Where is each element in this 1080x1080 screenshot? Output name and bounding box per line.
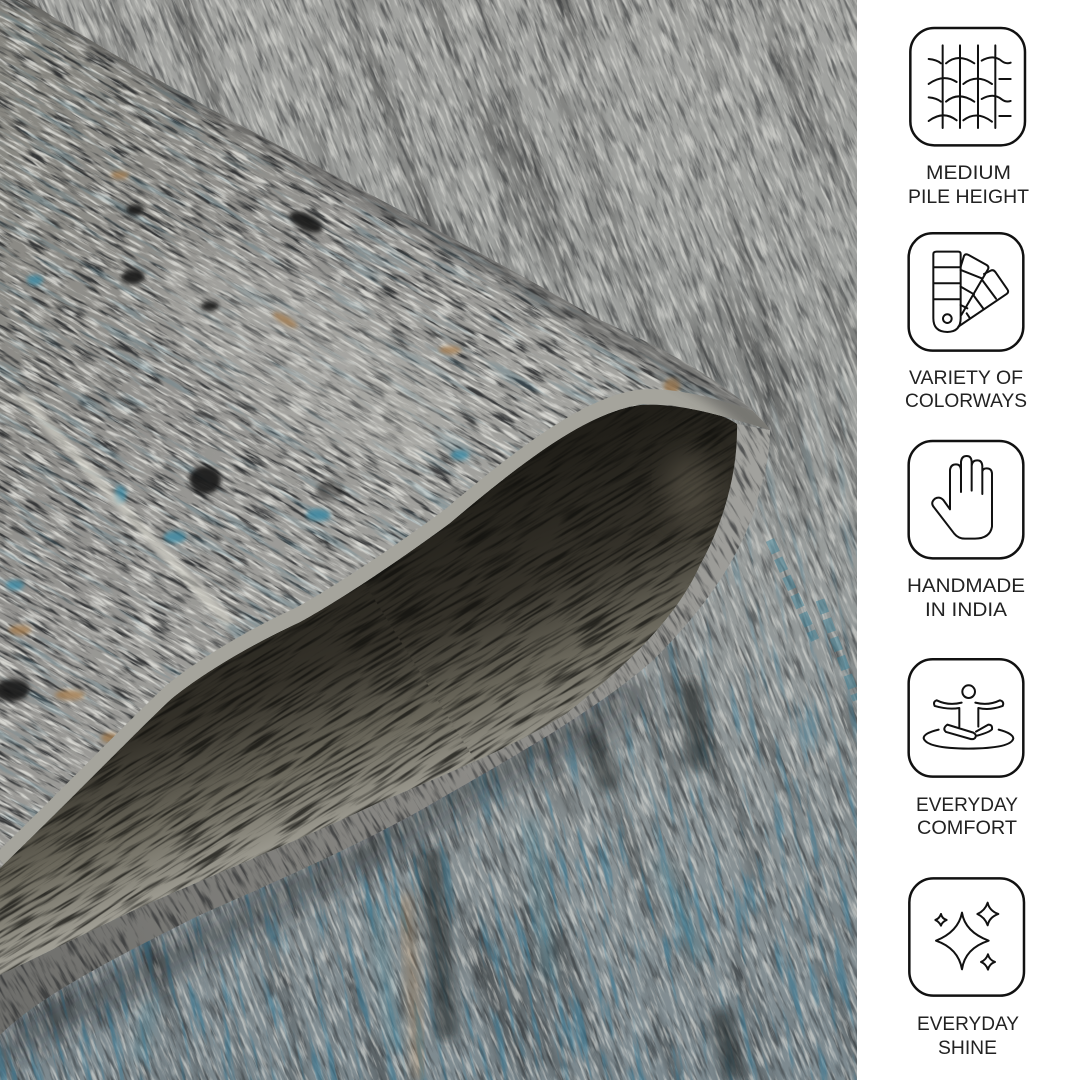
orange flecks (9, 171, 680, 743)
feature: handmade in india (907, 441, 1025, 621)
panel: rug photo (0, 0, 857, 1080)
feature: everyday shine (909, 878, 1024, 1059)
label: variety of colorways: COLORWAYS (905, 391, 1027, 412)
label: variety of colorways (905, 368, 1027, 412)
rug backing underside (0, 400, 760, 1000)
lip of the fold (0, 397, 770, 860)
label: medium pile height (908, 163, 1029, 208)
label: handmade in india (907, 576, 1025, 621)
pale streak (20, 395, 230, 625)
panel: white sidebar (857, 0, 1080, 1080)
label: variety of colorways: VARIETY OF (909, 368, 1023, 389)
label: medium pile height: PILE HEIGHT (908, 187, 1029, 208)
icon: meditating figure (909, 659, 1023, 777)
label: everyday shine (917, 1014, 1019, 1059)
label: everyday comfort: COMFORT (917, 818, 1017, 839)
rolled edge rope (0, 424, 770, 1035)
label: handmade in india: IN INDIA (925, 600, 1007, 621)
label: everyday comfort (916, 795, 1018, 839)
icon: sparkles (909, 878, 1024, 996)
feature: medium pile height (908, 28, 1029, 208)
icon: hand (909, 441, 1023, 558)
feature: variety of colorways (905, 233, 1027, 412)
rug floor surface (0, 0, 857, 1080)
dark flecks (0, 204, 344, 701)
feature: everyday comfort (909, 659, 1023, 839)
label: medium pile height: MEDIUM (926, 163, 1011, 184)
icon: pile height weave (910, 28, 1025, 145)
label: everyday shine: EVERYDAY (917, 1014, 1019, 1035)
label: handmade in india: HANDMADE (907, 576, 1025, 597)
label: everyday comfort: EVERYDAY (916, 795, 1018, 816)
icon: colour swatch fan (909, 233, 1023, 351)
rug top surface (0, 0, 780, 880)
label: everyday shine: SHINE (938, 1038, 997, 1059)
dark rim of the fold (0, 0, 770, 440)
teal flecks (6, 275, 469, 590)
